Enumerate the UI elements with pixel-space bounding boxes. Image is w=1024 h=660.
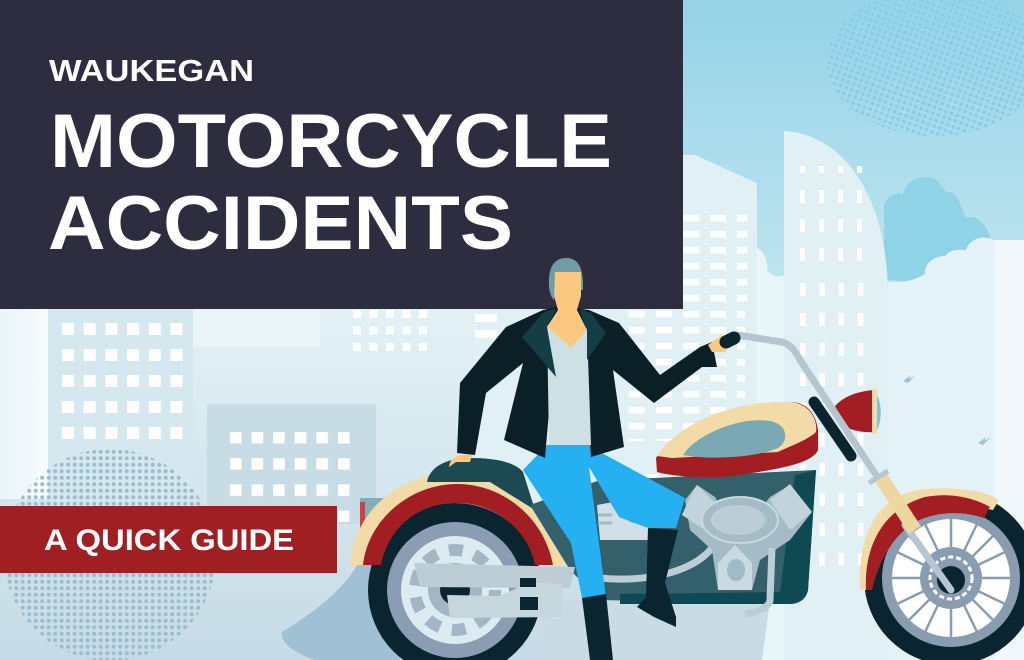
larger windows near tank: [475, 314, 660, 488]
pale tall building right: [995, 240, 1024, 660]
standing boot: [582, 594, 613, 660]
halftone circle bottom left: [4, 449, 216, 660]
small cloud left of tower: [757, 248, 784, 660]
neck and face: [547, 270, 587, 348]
frame and engine body: [530, 470, 816, 604]
motorcycle: [350, 335, 1024, 660]
blue cloud behind tower: [884, 177, 990, 282]
left tall building: [48, 309, 193, 509]
fork clamp: [869, 471, 888, 483]
birds: [903, 375, 991, 445]
middle building: [475, 155, 757, 520]
tower windows: [800, 166, 864, 568]
right hand: [708, 335, 729, 352]
jacket lapels: [522, 309, 606, 377]
lower fork: [905, 525, 951, 590]
pale upper block: [193, 309, 320, 347]
engine: [682, 484, 812, 590]
short building: [207, 404, 376, 524]
headlight: [835, 389, 881, 434]
rear fender: [350, 473, 565, 565]
exhaust curve: [600, 548, 712, 579]
left hand: [449, 455, 472, 467]
upper windows of middle building: [683, 215, 747, 311]
title panel: [0, 0, 683, 309]
rear tail light: [360, 498, 384, 532]
shirt: [547, 325, 591, 445]
raised boot: [637, 528, 678, 627]
front fender: [860, 488, 999, 590]
handlebar and fork: [737, 335, 878, 478]
lower windows of middle building: [629, 311, 745, 441]
fuel tank: [656, 402, 818, 477]
jacket: [457, 306, 717, 458]
ground shadow behind rear wheel: [282, 560, 400, 660]
cream fork sleeve: [880, 476, 915, 530]
title line 2: ACCIDENTS: [48, 181, 513, 266]
curved tower: [784, 131, 888, 660]
jeans: [523, 445, 685, 598]
title line 1: MOTORCYCLE: [50, 99, 612, 184]
front wheel: [864, 491, 1024, 660]
downpipe: [745, 548, 772, 614]
rider: [449, 258, 734, 660]
halftone sun top right: [827, 0, 1024, 136]
sky background: [0, 0, 1024, 310]
title kicker: WAUKEGAN: [49, 53, 254, 88]
small windows block: [353, 310, 434, 351]
subtitle text: A QUICK GUIDE: [44, 524, 294, 557]
short building windows: [230, 432, 351, 522]
rear wheel: [368, 503, 542, 660]
ground plate under bike: [540, 600, 770, 660]
left pale strip: [0, 309, 48, 499]
lower city background: [0, 309, 1024, 660]
exhaust pipes: [414, 563, 575, 618]
seat: [427, 458, 535, 510]
subtitle ribbon: [0, 506, 337, 573]
left building windows: [62, 323, 183, 439]
white clouds right: [888, 238, 1024, 660]
brake lever: [814, 402, 851, 456]
side engine cover: [597, 497, 655, 540]
handlebar grip: [726, 338, 734, 342]
hair: [549, 258, 583, 300]
